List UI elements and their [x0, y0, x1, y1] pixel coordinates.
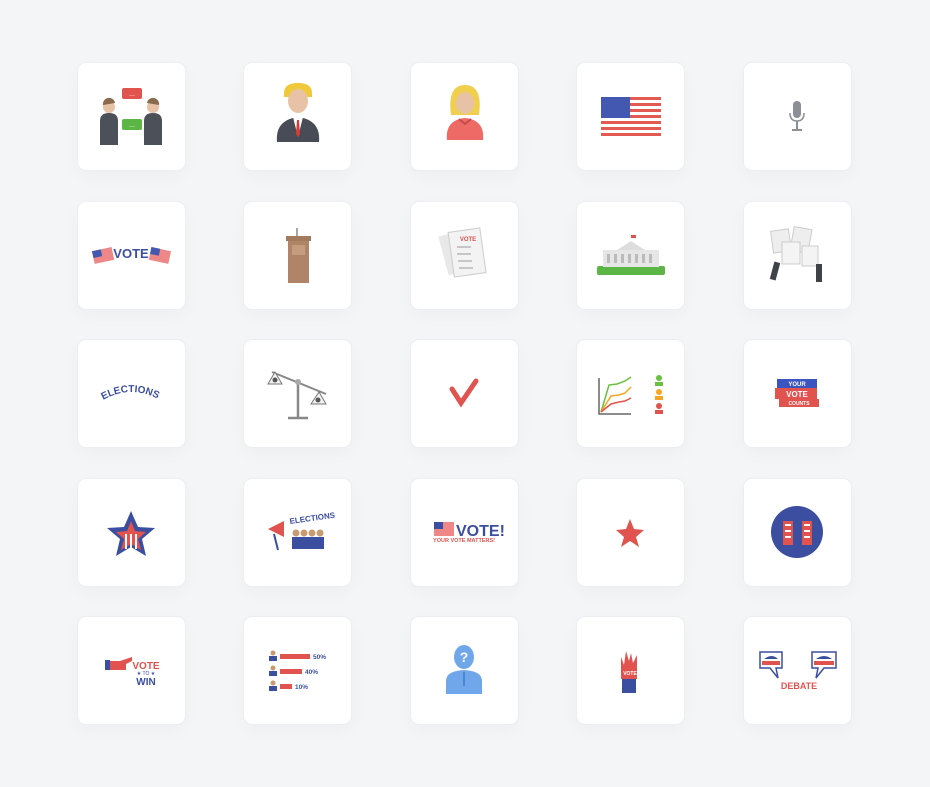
card: elections arc text: [78, 340, 185, 447]
card: poll bars: 50%: [313, 654, 326, 661]
card: vote hand: VOTE: [623, 671, 637, 677]
card: your vote counts: YOUR: [788, 382, 806, 388]
card: woman: [411, 63, 518, 170]
card: unknown candidate: ?: [460, 649, 468, 665]
card: vote hand: [577, 617, 684, 724]
card: ballot: [411, 202, 518, 309]
card: VOTE! your vote matters: VOTE!: [456, 523, 505, 540]
card: your vote counts: VOTE: [786, 390, 809, 399]
card: poll bars: 40%: [305, 669, 318, 676]
card: ballot: VOTE: [460, 237, 476, 243]
card: line chart: [577, 340, 684, 447]
card: man: [244, 63, 351, 170]
card: hands with ballots: [744, 202, 851, 309]
card: patriotic star: [78, 479, 185, 586]
card: white house: [577, 202, 684, 309]
card: vote to win: [78, 617, 185, 724]
card: vote to win: VOTE: [132, 661, 160, 672]
card: unknown candidate: [411, 617, 518, 724]
card: red star: [577, 479, 684, 586]
card: vote flags: [78, 202, 185, 309]
card: round emblem: [744, 479, 851, 586]
card: vote flags: VOTE: [113, 246, 149, 261]
card: megaphone elections: [244, 479, 351, 586]
card: debate people: [78, 63, 185, 170]
card: checkmark: [411, 340, 518, 447]
card: megaphone elections: ELECTIONS: [289, 511, 336, 526]
card: elections arc text: ELECTIONS: [100, 385, 160, 400]
card: VOTE! your vote matters: [411, 479, 518, 586]
card: poll bars: 10%: [295, 684, 308, 691]
card: your vote counts: [744, 340, 851, 447]
card: US flag: [577, 63, 684, 170]
card: vote to win: ★ TO ★: [137, 671, 156, 677]
card: debate people: ...: [129, 122, 135, 129]
card: your vote counts: COUNTS: [788, 401, 810, 407]
card: poll bars: [244, 617, 351, 724]
card: podium: [244, 202, 351, 309]
card: vote to win: WIN: [136, 677, 156, 688]
card: microphone: [744, 63, 851, 170]
card: debate bubbles: DEBATE: [781, 681, 817, 691]
card: debate bubbles: [744, 617, 851, 724]
card: scale: [244, 340, 351, 447]
card: debate people: ...: [129, 91, 135, 98]
card: VOTE! your vote matters: YOUR VOTE MATTERS!: [433, 538, 495, 544]
